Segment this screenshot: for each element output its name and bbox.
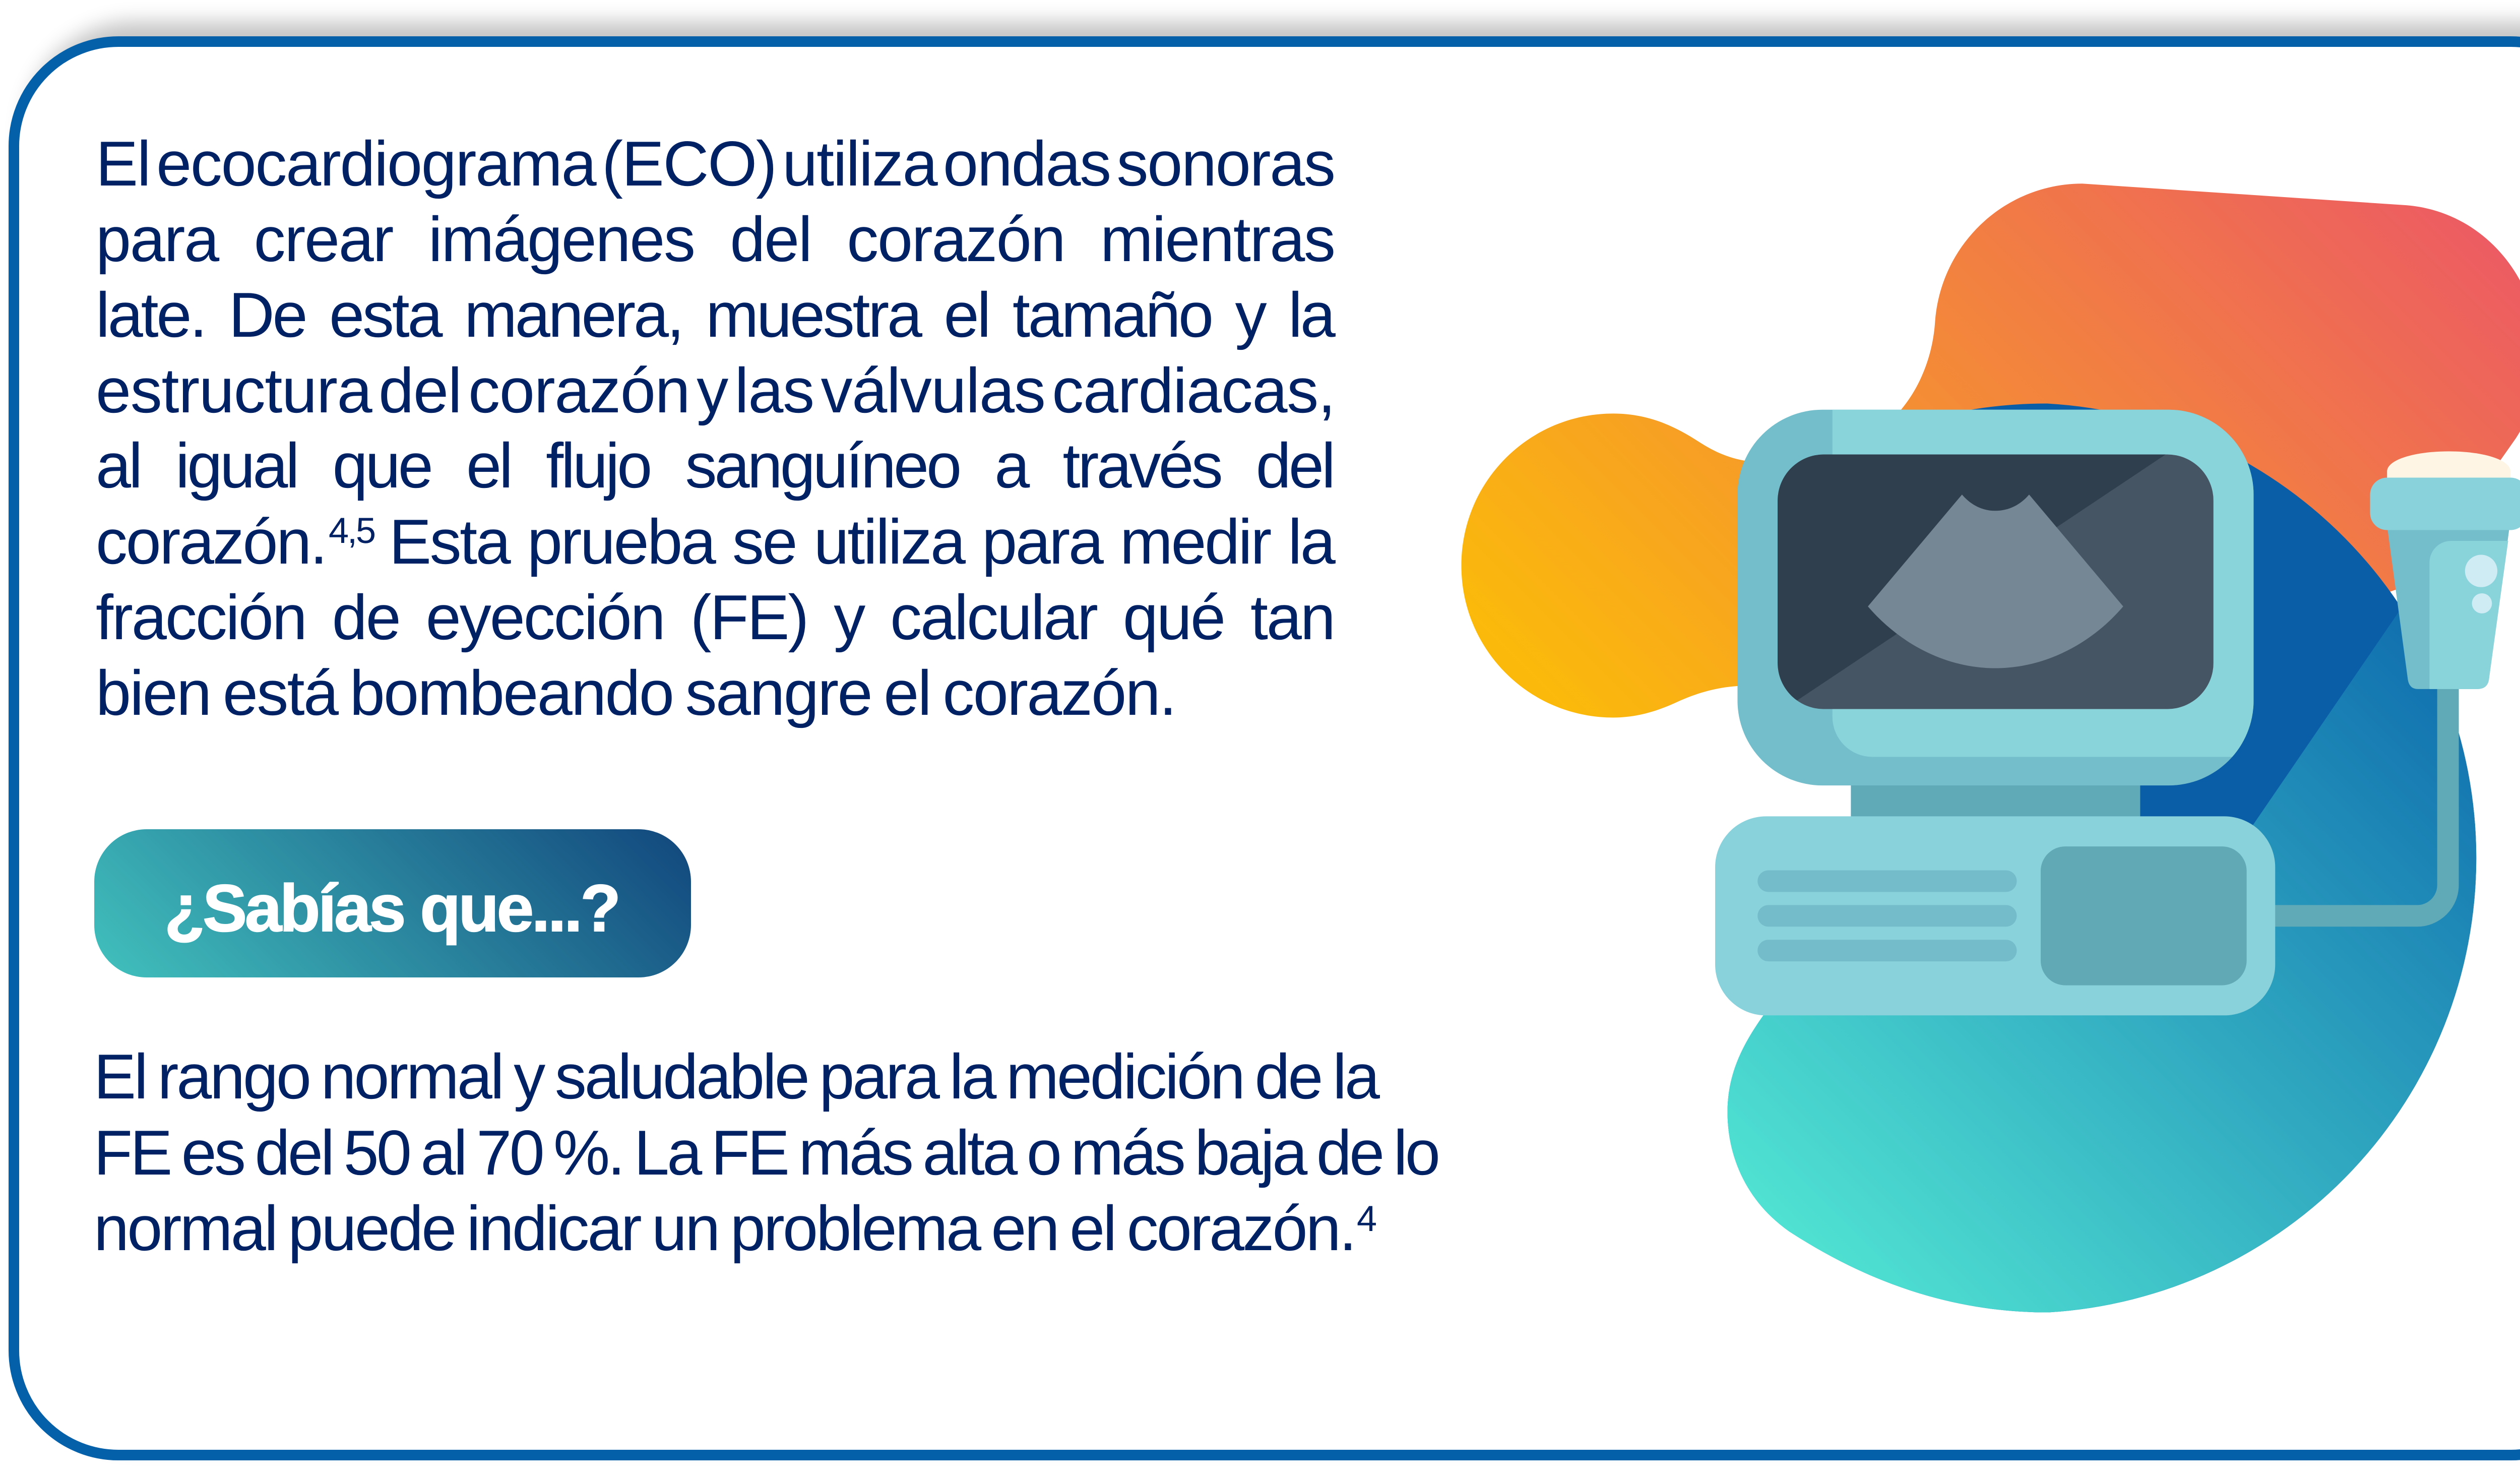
blob: orange [1461, 183, 2520, 717]
callout pill: ¿Sabías que...? [94, 829, 691, 977]
console bars [1757, 871, 2017, 961]
line 6 end: Esta prueba se utiliza para medir la [389, 506, 1336, 577]
text block: ecocardiogram description [96, 128, 1336, 728]
illustration: ultrasound machine on gradient blobs [1461, 183, 2520, 1386]
line 4: estructura del corazón y las válvulas cardiacas, [96, 355, 1336, 426]
line 3: normal puede indicar un problema en el corazón. [94, 1193, 1357, 1264]
superscript 4: 4 [1357, 1199, 1377, 1239]
cable [2267, 676, 2448, 916]
blob: blue and teal [1728, 403, 2477, 1313]
console panel [2041, 846, 2247, 986]
line 7: fracción de eyección (FE) y calcular qué tan [96, 582, 1336, 653]
line 2: FE es del 50 al 70 %. La FE más alta o más baja de lo [94, 1117, 1440, 1188]
text block: normal EF range [94, 1041, 1440, 1264]
line 1: El rango normal y saludable para la medición de la [94, 1041, 1380, 1112]
monitor neck [1851, 780, 2140, 823]
line 3: late. De esta manera, muestra el tamaño y la [96, 279, 1336, 350]
superscript 4,5: 4,5 [329, 511, 376, 551]
line 6 start: corazón. [96, 506, 328, 577]
line 8: bien está bombeando sangre el corazón. [96, 657, 1177, 728]
monitor [1737, 383, 2260, 785]
line 5: al igual que el flujo sanguíneo a través del [96, 430, 1336, 501]
screen [1774, 455, 2214, 716]
line 1: El ecocardiograma (ECO) utiliza ondas sonoras [96, 128, 1336, 199]
ultrasound probe [2370, 451, 2520, 689]
line 2: para crear imágenes del corazón mientras [96, 204, 1336, 275]
console base [1715, 816, 2275, 1015]
callout pill: ¿Sabías que...?: ¿Sabías que...? [164, 871, 621, 945]
ultrasound sector image [1868, 495, 2123, 668]
